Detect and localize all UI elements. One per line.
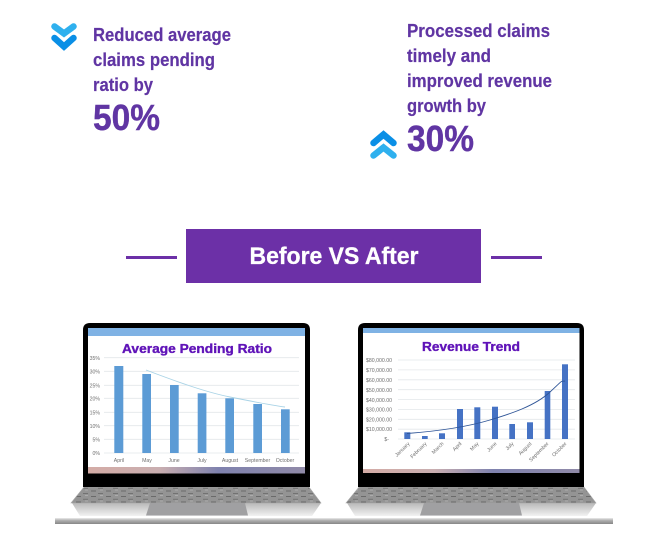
bar chart: pending ratio: October	[276, 458, 294, 464]
bar chart: revenue: February	[409, 441, 429, 460]
bar chart: revenue: October	[551, 441, 569, 458]
text block: processed claims	[407, 21, 552, 159]
bar chart: revenue: $40,000.00	[366, 398, 392, 404]
heading banner: before vs after	[186, 229, 481, 283]
panel: right laptop revenue trend	[337, 323, 613, 524]
text block: processed claims: growth by	[407, 96, 486, 116]
bar chart: revenue: May	[469, 441, 481, 452]
bar chart: pending ratio: 10%	[90, 424, 100, 430]
text block: processed claims: improved revenue	[407, 71, 552, 91]
bar chart: pending ratio: June	[168, 458, 180, 464]
text block: reduced pending ratio: Reduced average	[93, 25, 231, 45]
left heading rule	[126, 256, 177, 259]
text block: processed claims: Processed claims	[407, 21, 550, 41]
text block: reduced pending ratio: claims pending	[93, 50, 215, 70]
bar chart: revenue	[366, 358, 575, 463]
bar chart: revenue: June	[486, 441, 498, 453]
bar chart: pending ratio: 25%	[90, 384, 100, 390]
panel: left laptop average pending ratio	[55, 323, 337, 524]
text block: reduced pending ratio: 50%	[93, 97, 160, 138]
screen bottom strip	[88, 467, 305, 474]
bar chart: pending ratio: May	[142, 458, 152, 464]
text block: processed claims: timely and	[407, 46, 491, 66]
bar chart: revenue: January	[394, 441, 412, 458]
bar chart: pending ratio: 15%	[90, 410, 100, 416]
bar chart: pending ratio: 0%	[92, 451, 100, 457]
bar chart: revenue: $20,000.00	[366, 418, 392, 424]
bar chart: revenue: March	[431, 441, 445, 456]
screen bottom strip	[363, 469, 580, 473]
bar chart: revenue: September	[528, 441, 551, 463]
bar chart: pending ratio: September	[245, 458, 270, 464]
bar chart: pending ratio: 30%	[90, 370, 100, 376]
laptop bezel	[358, 323, 584, 487]
screen top bar	[88, 328, 305, 336]
icon: double chevron down	[54, 26, 74, 46]
laptop base	[337, 487, 613, 524]
chart title: Revenue Trend	[422, 339, 520, 354]
text block: reduced pending ratio	[93, 25, 231, 138]
heading banner: before vs after: Before VS After	[250, 243, 418, 270]
chart title: Average Pending Ratio	[122, 341, 272, 356]
text block: processed claims: 30%	[407, 118, 474, 159]
bar chart: revenue: $-	[384, 437, 389, 443]
right heading rule	[491, 256, 542, 259]
bar chart: revenue: $30,000.00	[366, 408, 392, 414]
screen	[88, 328, 305, 464]
bar chart: pending ratio: July	[197, 458, 207, 464]
bar chart: revenue: August	[518, 441, 534, 457]
bar chart: pending ratio: 20%	[90, 396, 100, 402]
bar chart: revenue: $70,000.00	[366, 368, 392, 374]
icon: double chevron up	[374, 134, 394, 156]
bar chart: revenue: $60,000.00	[366, 378, 392, 384]
screen top bar	[363, 328, 580, 333]
bar chart: revenue: April	[452, 441, 463, 453]
bar chart: revenue: $80,000.00	[366, 358, 392, 364]
laptop base	[55, 487, 337, 524]
bar chart: pending ratio: 35%	[90, 356, 100, 362]
bar chart: pending ratio: April	[114, 458, 124, 464]
screen	[363, 328, 580, 464]
bar chart: revenue: $50,000.00	[366, 388, 392, 394]
bar chart: pending ratio: August	[222, 458, 239, 464]
bar chart: revenue: July	[505, 441, 516, 452]
bar chart: pending ratio: 5%	[92, 438, 100, 444]
text block: reduced pending ratio: ratio by	[93, 75, 153, 95]
laptop bezel	[83, 323, 310, 487]
bar chart: revenue: $10,000.00	[366, 427, 392, 433]
bar chart: pending ratio	[90, 356, 299, 464]
